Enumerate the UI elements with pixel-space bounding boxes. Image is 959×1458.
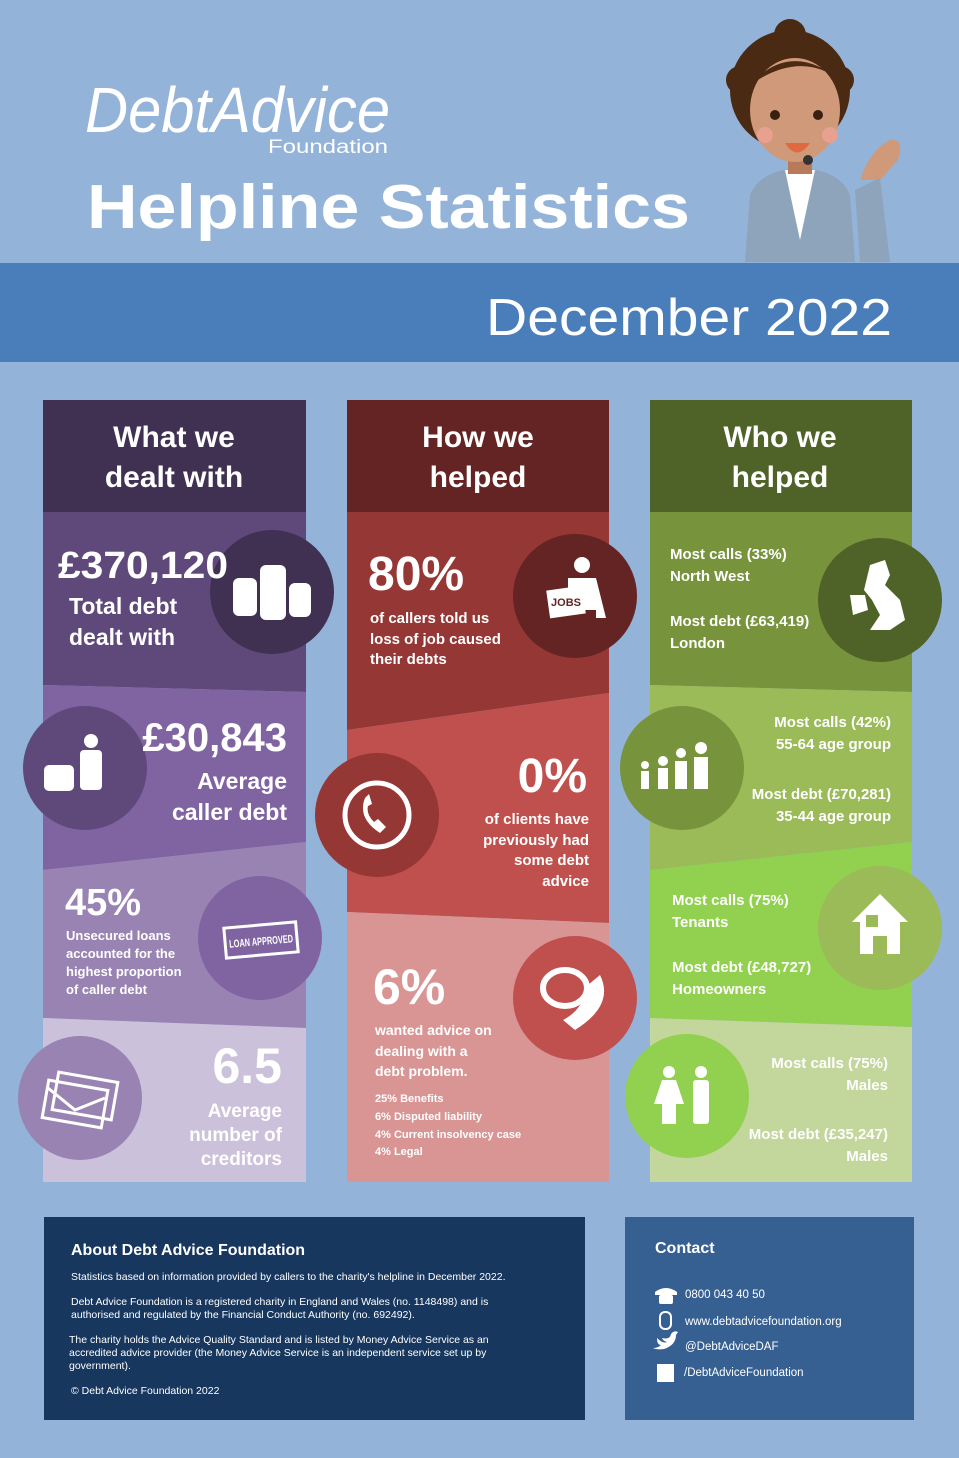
panel: contact: www.debtadvicefoundation.org xyxy=(684,1316,842,1328)
panel: about: government). xyxy=(69,1360,131,1372)
stat: region xyxy=(670,546,809,652)
stat: age: 35-44 age group xyxy=(776,808,891,825)
stat: 0%: advice xyxy=(542,873,589,890)
panel: about: Debt Advice Foundation is a registered charity in England and Wales (no. 1148498) and is xyxy=(71,1296,488,1308)
stat: 45% unsecured loans: accounted for the xyxy=(66,946,175,961)
stat: region: London xyxy=(670,635,725,652)
stat: tenure: Most calls (75%) xyxy=(672,892,789,909)
stat: 6% xyxy=(373,959,521,1158)
stat: 45% unsecured loans: 45% xyxy=(65,882,141,924)
stat: gender: Most calls (75%) xyxy=(771,1055,888,1072)
stat: 6%: dealing with a xyxy=(375,1043,468,1059)
icon: UK map xyxy=(818,538,942,662)
icon: person with coins xyxy=(23,706,147,830)
stat: 45% unsecured loans: of caller debt xyxy=(66,982,148,997)
stat: 6.5 creditors xyxy=(189,1038,283,1170)
panel: contact: /DebtAdviceFoundation xyxy=(684,1367,804,1379)
icon: telephone xyxy=(655,1288,677,1304)
icon: mouse xyxy=(660,1312,671,1329)
panel: how we helped xyxy=(315,400,637,1182)
stat: 6%: 4% Legal xyxy=(375,1146,423,1158)
stat: age: Most debt (£70,281) xyxy=(752,786,891,803)
stat: tenure: Most debt (£48,727) xyxy=(672,959,811,976)
icon: chat phone xyxy=(513,936,637,1060)
stat: 6.5 creditors: 6.5 xyxy=(212,1038,282,1094)
stat: 0%: of clients have xyxy=(485,811,589,828)
stat: 80%: their debts xyxy=(370,651,447,668)
panel: about: About Debt Advice Foundation xyxy=(71,1242,305,1259)
stat: 45% unsecured loans xyxy=(65,882,182,997)
stat: 6.5 creditors: Average xyxy=(208,1101,282,1122)
stat: 6%: 6% Disputed liability xyxy=(375,1111,483,1123)
stat: 0%: 0% xyxy=(518,750,587,803)
panel: about: accredited advice provider (the Money Advice Service is an independent service set up by xyxy=(69,1347,487,1359)
icon: coins xyxy=(210,530,334,654)
panel: contact: Contact xyxy=(655,1240,715,1257)
stat: 45% unsecured loans: Unsecured loans xyxy=(66,928,171,943)
panel: about: The charity holds the Advice Quality Standard and is listed by Money Advice Service as an xyxy=(69,1334,489,1346)
icon: jobs newspaper xyxy=(513,534,637,658)
panel: what we dealt with xyxy=(18,400,334,1182)
heading: What we dealt with: What we xyxy=(113,421,235,454)
icon: twitter xyxy=(653,1331,678,1349)
stat: age: Most calls (42%) xyxy=(774,714,891,731)
stat: 80%: of callers told us xyxy=(370,610,489,627)
stat: 6%: wanted advice on xyxy=(374,1022,492,1038)
heading: Who we helped: Who we xyxy=(723,421,837,454)
icon: envelopes xyxy=(18,1036,142,1160)
stat: 80% xyxy=(368,548,501,668)
stat: tenure: Homeowners xyxy=(672,981,766,998)
stat: 6.5 creditors: number of xyxy=(189,1125,283,1146)
stat: 0%: some debt xyxy=(514,852,589,869)
stat: age: 55-64 age group xyxy=(776,736,891,753)
stat: 6%: 6% xyxy=(373,959,445,1015)
panel: how we helped: helped xyxy=(430,461,526,494)
stat: 80%: 80% xyxy=(368,548,464,601)
heading: How we helped: How we xyxy=(422,421,534,454)
stat: tenure xyxy=(672,892,811,998)
stat: total debt: Total debt xyxy=(69,593,178,619)
panel: contact: @DebtAdviceDAF xyxy=(685,1341,778,1353)
icon: jobs newspaper: JOBS xyxy=(551,597,581,609)
stat: region: North West xyxy=(670,568,750,585)
stat: total debt xyxy=(58,545,228,650)
stat: region: Most debt (£63,419) xyxy=(670,613,809,630)
icon: man and woman xyxy=(625,1034,749,1158)
icon: house xyxy=(818,866,942,990)
stat: 0%: previously had xyxy=(483,832,589,849)
panel: contact xyxy=(625,1217,914,1420)
banner: December 2022 xyxy=(0,263,959,362)
icon: facebook xyxy=(657,1364,674,1382)
banner: December 2022: December 2022 xyxy=(486,289,892,347)
icon: phone xyxy=(315,753,439,877)
stat: gender: Males xyxy=(846,1148,888,1165)
stat: 0% xyxy=(483,750,589,890)
stat: gender: Males xyxy=(846,1077,888,1094)
icon: family xyxy=(620,706,744,830)
stat: average caller debt xyxy=(142,716,287,825)
stat: average caller debt: caller debt xyxy=(172,799,287,825)
panel: who we helped: helped xyxy=(732,461,828,494)
panel: about: authorised and regulated by the Financial Conduct Authority (no. 692492). xyxy=(71,1309,415,1321)
logo: Debt Advice Foundation: Foundation xyxy=(268,137,388,158)
stat: average caller debt: Average xyxy=(197,768,287,794)
stat: 6.5 creditors: creditors xyxy=(201,1149,282,1170)
stat: 6%: 25% Benefits xyxy=(375,1093,443,1105)
stat: 45% unsecured loans: highest proportion xyxy=(66,964,182,979)
stat: age xyxy=(752,714,891,825)
stat: region: Most calls (33%) xyxy=(670,546,787,563)
stat: 6%: 4% Current insolvency case xyxy=(375,1129,521,1141)
stat: gender: Most debt (£35,247) xyxy=(749,1126,888,1143)
stat: average caller debt: £30,843 xyxy=(142,716,287,760)
panel: about: Statistics based on information provided by callers to the charity's helpline in December 2022. xyxy=(71,1271,505,1283)
stat: 6%: debt problem. xyxy=(375,1063,468,1079)
panel: contact: 0800 043 40 50 xyxy=(685,1289,765,1301)
panel: about: © Debt Advice Foundation 2022 xyxy=(71,1385,220,1397)
stat: tenure: Tenants xyxy=(672,914,728,931)
stat: total debt: £370,120 xyxy=(58,545,228,587)
icon: loan approved: LOAN APPROVED xyxy=(229,933,294,951)
stat: gender xyxy=(749,1055,888,1165)
logo: Debt Advice Foundation: DebtAdvice xyxy=(85,74,390,146)
panel: who we helped xyxy=(620,400,942,1182)
stat: total debt: dealt with xyxy=(69,624,175,650)
illustration: helpline woman xyxy=(726,19,900,262)
stat: 80%: loss of job caused xyxy=(370,631,501,648)
icon: loan approved xyxy=(198,876,322,1000)
title: Helpline Statistics xyxy=(87,173,690,242)
panel: what we dealt with: dealt with xyxy=(105,461,243,494)
panel: about xyxy=(44,1217,585,1420)
